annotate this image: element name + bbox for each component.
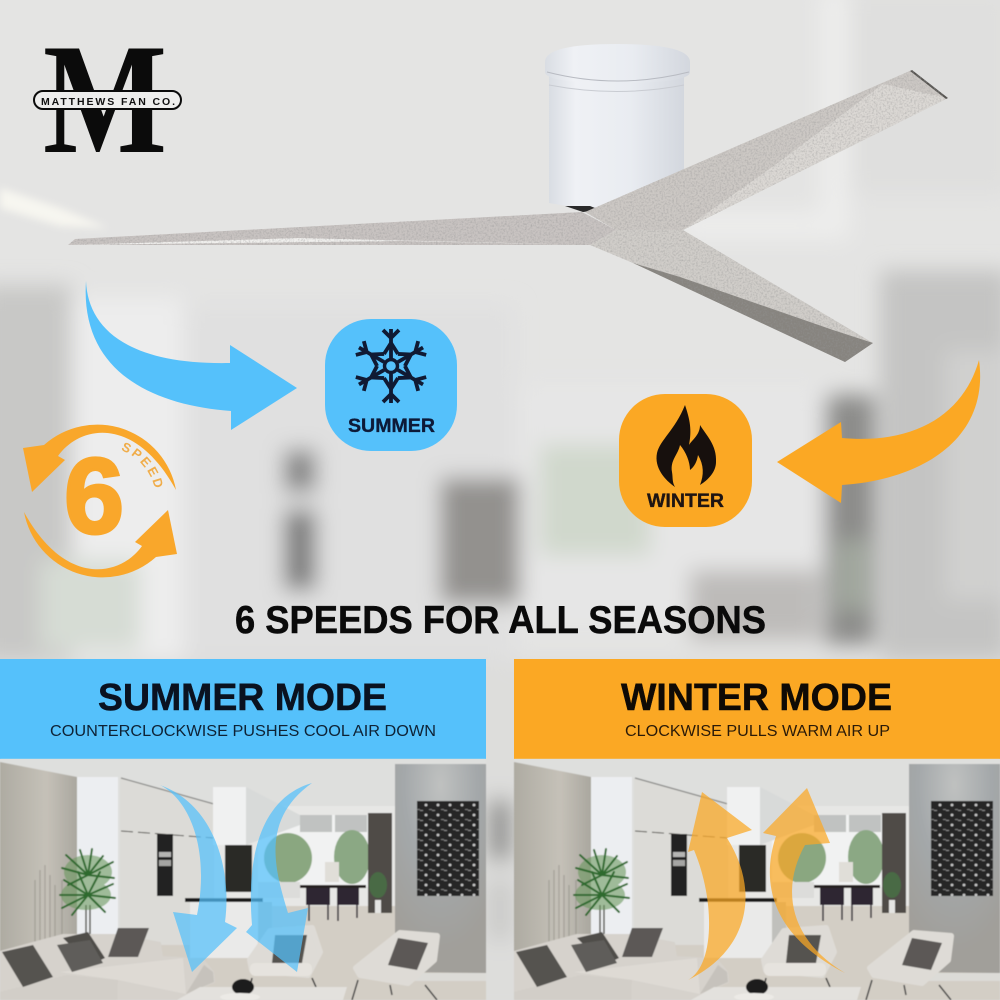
icon: six speed badge: 6 xyxy=(64,435,124,556)
summer room photo xyxy=(0,759,486,1000)
icon: summer badge xyxy=(325,319,457,451)
fan blade: left xyxy=(68,212,616,245)
icon: winter badge: WINTER xyxy=(647,491,724,512)
summer header: SUMMER MODE xyxy=(98,677,387,719)
ceiling fan xyxy=(68,44,948,362)
airflow arrows down xyxy=(160,783,312,972)
fan motor housing xyxy=(545,44,690,212)
summer header: COUNTERCLOCKWISE PUSHES COOL AIR DOWN xyxy=(50,723,436,740)
fan blade: lower right xyxy=(590,230,873,362)
arrow: blue summer arrow xyxy=(86,281,297,430)
icon: six speed badge xyxy=(23,424,177,578)
circular arrow top xyxy=(23,425,176,492)
icon: six speed badge: SPEED xyxy=(122,442,162,488)
icon: winter badge xyxy=(619,394,752,527)
winter header: WINTER MODE xyxy=(621,677,892,719)
fan blade: upper right xyxy=(585,70,948,230)
arrow: orange winter arrow xyxy=(777,360,980,503)
title: 6 SPEEDS FOR ALL SEASONS xyxy=(235,599,766,642)
panel: winter mode xyxy=(514,659,1000,1000)
circular arrow bottom xyxy=(24,510,177,577)
winter header: CLOCKWISE PULLS WARM AIR UP xyxy=(625,723,890,740)
summer header xyxy=(0,659,486,759)
icon: flame xyxy=(656,405,716,487)
icon: snowflake xyxy=(355,329,427,403)
airflow arrows up xyxy=(688,788,845,980)
panel: summer mode xyxy=(0,659,486,1000)
logo: Matthews Fan Co.: MATTHEWS FAN CO. xyxy=(41,96,175,108)
winter header xyxy=(514,659,1000,759)
icon: summer badge: SUMMER xyxy=(348,416,435,437)
winter room photo xyxy=(514,759,1000,1000)
logo: Matthews Fan Co.: M xyxy=(43,12,167,187)
